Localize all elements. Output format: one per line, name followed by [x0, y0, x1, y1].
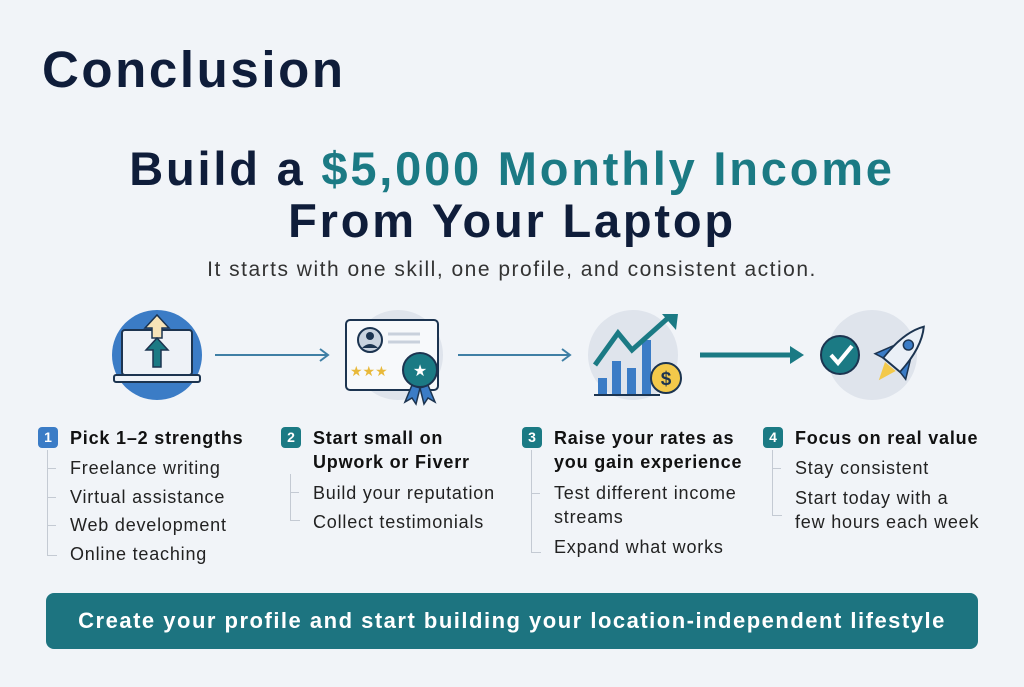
arrow 1 [215, 349, 328, 361]
text: Freelance writing [70, 458, 221, 478]
title: Build a $5,000 Monthly Income [129, 142, 895, 195]
text: Online teaching [70, 544, 207, 564]
icons row [112, 310, 925, 406]
text: Raise your rates as [554, 428, 734, 448]
icon: check and rocket [821, 310, 939, 400]
text: Test different income [554, 483, 737, 503]
text: 4 [769, 429, 777, 445]
text: Start today with a [795, 488, 948, 508]
icon: profile card with award: ★★★ [350, 364, 388, 380]
text: Build your reputation [313, 483, 495, 503]
column 4 [763, 427, 979, 532]
text: Expand what works [554, 537, 724, 557]
text: Web development [70, 515, 227, 535]
text: you gain experience [554, 452, 742, 472]
subtitle: It starts with one skill, one profile, and consistent action. [207, 258, 817, 281]
column 2 [281, 427, 495, 532]
arrow 3 [700, 352, 795, 358]
icon: laptop upload [112, 310, 202, 400]
text: Collect testimonials [313, 512, 484, 532]
text: few hours each week [795, 512, 979, 532]
arrow 2 [458, 349, 570, 361]
title: From Your Laptop [288, 194, 736, 247]
icon: profile card with award: ★ [413, 361, 427, 380]
icon: growth chart with coin: $ [661, 369, 672, 390]
text: 3 [528, 429, 536, 445]
text: 1 [44, 429, 52, 445]
icon: profile card with award [346, 310, 443, 404]
text: Pick 1–2 strengths [70, 428, 243, 448]
text: Stay consistent [795, 458, 929, 478]
column 1 [38, 427, 243, 564]
text: Upwork or Fiverr [313, 452, 470, 472]
text: streams [554, 507, 624, 527]
icon: growth chart with coin [588, 310, 681, 400]
call to action button: Create your profile and start building your location-independent lifestyle [78, 608, 946, 633]
title [129, 142, 895, 247]
column 3 [522, 427, 742, 557]
text: 2 [287, 429, 295, 445]
text: Focus on real value [795, 428, 978, 448]
text: Start small on [313, 428, 443, 448]
call to action button [46, 593, 978, 649]
heading: Conclusion: Conclusion [42, 41, 346, 98]
text: Virtual assistance [70, 487, 225, 507]
